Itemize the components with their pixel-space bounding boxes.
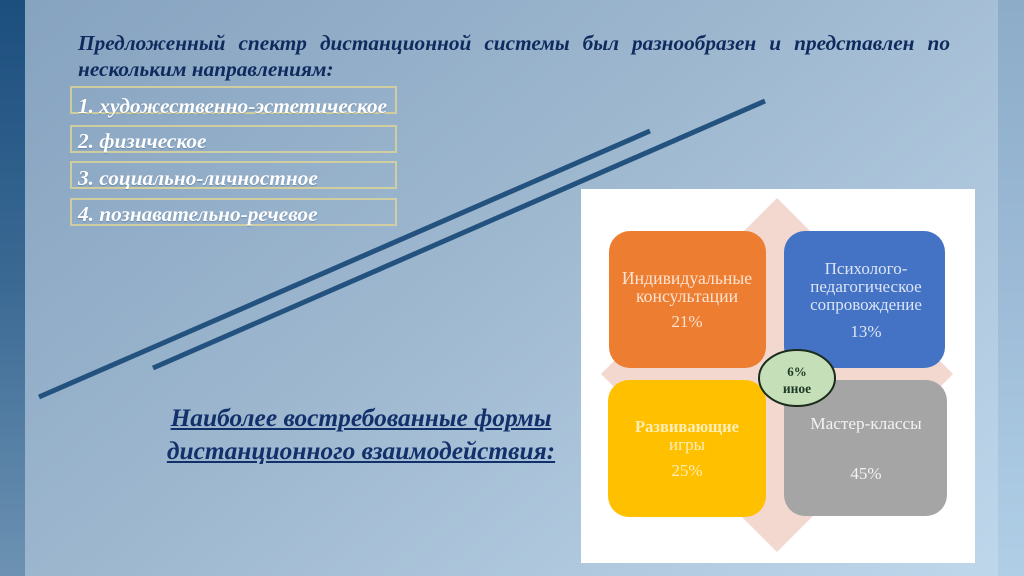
list item 2: 2. физическое	[78, 129, 206, 153]
center ellipse: other 6%	[759, 350, 835, 406]
left side band	[0, 0, 25, 576]
quadrant: developmental games 25%	[608, 380, 766, 517]
intro heading text: Предложенный спектр дистанционной системы был разнообразен и представлен по	[78, 31, 950, 55]
quadrant: developmental games 25%: Развивающие	[635, 417, 739, 436]
cross arrows background	[601, 198, 953, 552]
quadrant: psychological and pedagogical support 13%: 13%	[850, 322, 882, 341]
quadrant: individual consultations 21%: 21%	[671, 312, 703, 331]
quadrant: individual consultations 21%: Индивидуальные	[622, 268, 752, 288]
quadrant: developmental games 25%: 25%	[671, 461, 703, 480]
quadrant: psychological and pedagogical support 13%: педагогическое	[810, 277, 922, 296]
quadrant: master classes 45%	[784, 380, 947, 516]
quadrant: psychological and pedagogical support 13%: Психолого-	[825, 259, 908, 278]
quadrant: psychological and pedagogical support 13%	[784, 231, 945, 368]
right side band	[998, 0, 1024, 576]
subheading: дистанционного взаимодействия:	[167, 437, 555, 465]
list item 1	[70, 86, 397, 114]
quadrant: psychological and pedagogical support 13%: сопровождение	[810, 295, 922, 314]
subheading	[166, 404, 556, 465]
list item 4: 4. познавательно-речевое	[78, 202, 318, 226]
quadrant: master classes 45%: Мастер-классы	[810, 414, 922, 433]
quadrant: individual consultations 21%	[609, 231, 766, 368]
list item 3	[70, 161, 397, 189]
quadrant: individual consultations 21%: консультации	[636, 286, 739, 306]
intro heading text: нескольким направлениям:	[78, 57, 334, 81]
center ellipse: other 6%: 6%	[787, 364, 807, 379]
list item 2	[70, 125, 397, 153]
list item 1: 1. художественно-эстетическое	[78, 94, 387, 118]
center ellipse: other 6%: иное	[783, 381, 811, 396]
list item 4	[70, 198, 397, 226]
list item 3: 3. социально-личностное	[78, 166, 318, 190]
quadrant: developmental games 25%: игры	[669, 435, 706, 454]
subheading: Наиболее востребованные формы	[171, 404, 551, 432]
intro heading text	[78, 31, 950, 81]
diagram panel: forms of interaction	[581, 189, 975, 563]
quadrant: master classes 45%: 45%	[850, 464, 882, 483]
